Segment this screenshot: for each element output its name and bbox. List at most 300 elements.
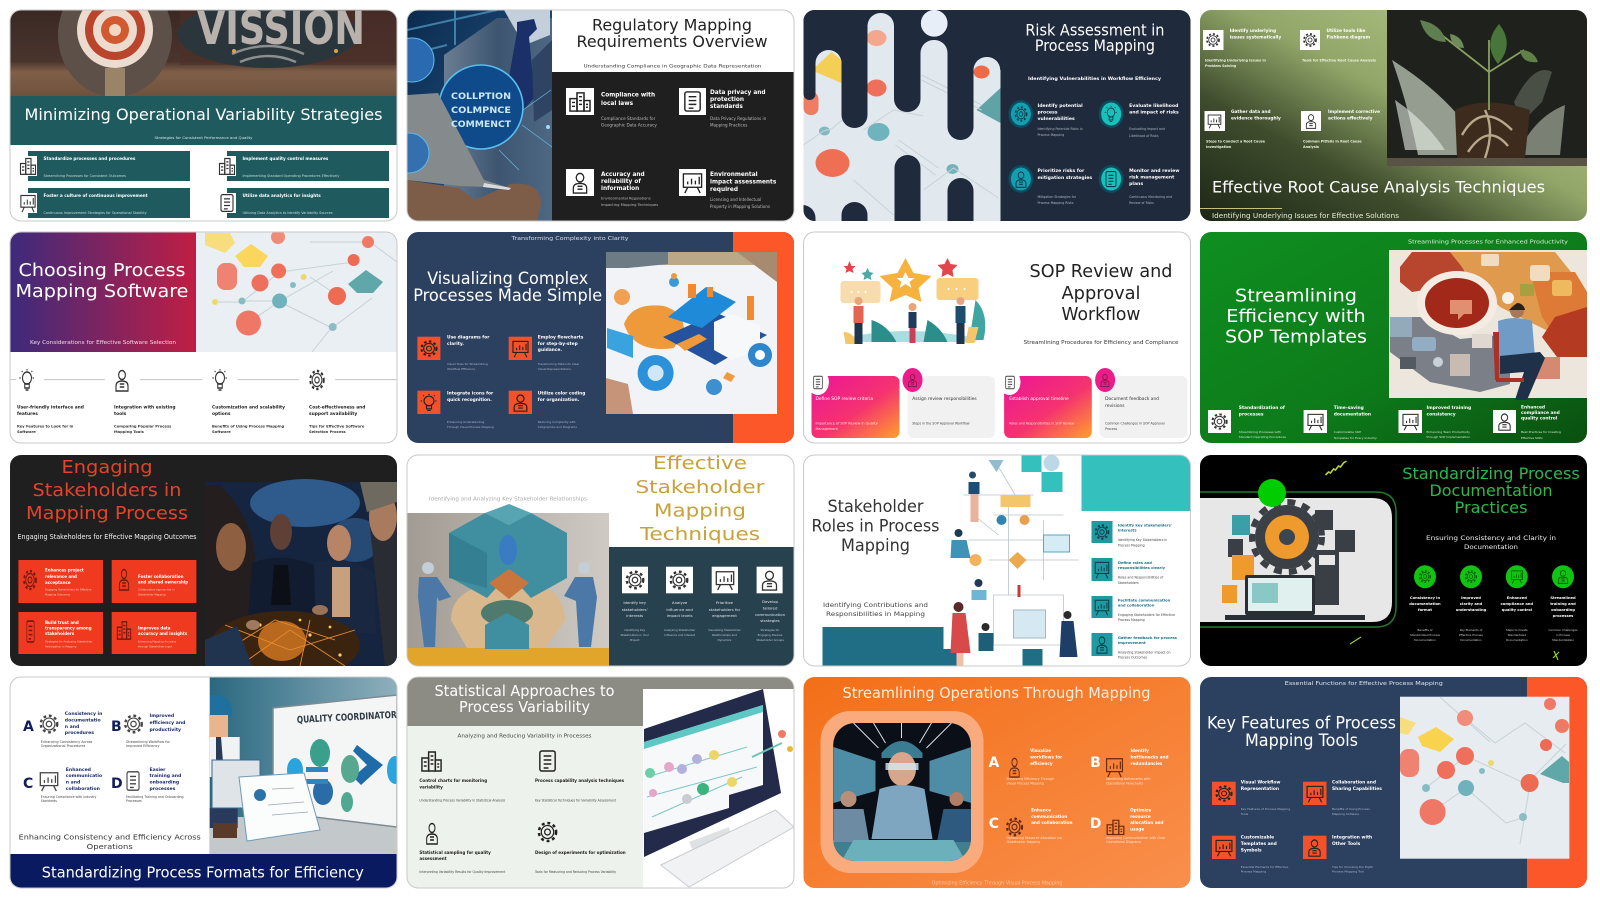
item: cost-effectiveness: Cost-effectiveness and bbox=[309, 404, 365, 410]
item: standardize bbox=[19, 151, 190, 181]
item B: Identifying Bottlenecks with bbox=[1106, 777, 1151, 781]
item: collaboration: Sharing Capabilities bbox=[1332, 786, 1382, 792]
item: compliance: compliance and bbox=[1501, 602, 1533, 606]
panel: statistical approaches bbox=[407, 677, 794, 888]
item: consistency: format bbox=[1418, 608, 1432, 612]
item: accuracy: Accuracy and bbox=[601, 172, 645, 178]
item A: Visualize bbox=[1030, 748, 1051, 753]
item: corrective actions: actions effectively bbox=[1328, 116, 1373, 122]
item A bbox=[988, 748, 1063, 786]
item D: onboarding bbox=[150, 780, 179, 786]
item: trust: Build trust and bbox=[45, 620, 79, 625]
item: customization: options bbox=[212, 411, 231, 417]
card: approval timeline: Establish approval timeline bbox=[1009, 396, 1069, 402]
item: collaboration: and shared ownership bbox=[138, 580, 188, 584]
item: consistency: documentation bbox=[1409, 602, 1441, 606]
item A: procedures bbox=[65, 730, 94, 736]
image: target bulb and vision sign bbox=[10, 10, 396, 96]
item: accuracy: information bbox=[601, 186, 639, 192]
item: diagrams: Workflow Efficiency bbox=[447, 367, 475, 371]
item: gather feedback: Analyzing Stakeholder Impact on bbox=[1118, 650, 1171, 654]
item: accuracy bbox=[566, 169, 658, 207]
item: prioritize stakeholders: engagement bbox=[712, 613, 737, 618]
item: define roles: Define roles and bbox=[1118, 561, 1152, 565]
item: facilitate communication: Process Mapping bbox=[1118, 618, 1145, 622]
item: continuous improvement: Foster a culture of continuous improvement bbox=[44, 193, 148, 198]
item: integration: Mapping Tools bbox=[114, 430, 145, 434]
item: prioritize stakeholders: Prioritize bbox=[716, 600, 734, 605]
item: user-friendly: Key Features to Look for in bbox=[17, 424, 74, 428]
panel: stakeholder roles bbox=[804, 455, 1190, 666]
card: assign responsibilities: Assign review responsibilities bbox=[912, 396, 977, 402]
item: training: training and bbox=[1550, 602, 1576, 606]
item: gather data bbox=[1204, 109, 1281, 149]
item: consistency: Documentation bbox=[1414, 638, 1436, 642]
item: templates: Customizable bbox=[1241, 834, 1274, 840]
item: diagrams: clarity. bbox=[447, 341, 464, 347]
item: compliance: Enhanced bbox=[1521, 404, 1545, 410]
item: templates: Essential Elements for Effective bbox=[1241, 865, 1288, 869]
item: local laws: Compliance Standards for bbox=[601, 116, 656, 121]
subtitle: Key Considerations for Effective Software Selection bbox=[30, 340, 176, 346]
item: define roles: responsibilities clearly bbox=[1118, 566, 1166, 570]
item: integration: tools bbox=[114, 411, 127, 417]
item: local laws: Compliance with bbox=[601, 92, 655, 98]
title: Risk Assessment in bbox=[1025, 20, 1164, 40]
panel: standardizing documentation bbox=[1200, 455, 1587, 666]
panel: minimizing operational variability bbox=[10, 0, 397, 221]
item: collaboration: Collaborative Approaches in bbox=[138, 587, 175, 591]
item: relevance: Enhances project bbox=[45, 568, 84, 572]
item: gather feedback: Gather feedback for process bbox=[1118, 636, 1178, 640]
item: corrective actions bbox=[1301, 109, 1380, 149]
item: training: through SOP Implementation bbox=[1426, 435, 1470, 439]
image: woman and analysts with mapping table bbox=[820, 711, 984, 873]
item: likelihood: Likelihood of Risks bbox=[1129, 134, 1159, 138]
item: communication strategies: communication bbox=[755, 612, 786, 617]
item: integration: Process Mapping Tool bbox=[1332, 870, 1364, 874]
item: monitor bbox=[1099, 165, 1180, 205]
item: relevance: Engaging Stakeholders for Effective bbox=[45, 587, 92, 591]
item: flowcharts: Employ flowcharts bbox=[538, 334, 584, 340]
timeline line bbox=[10, 379, 396, 380]
item: continuous improvement: Continuous Improvement Strategies for Operational Stability bbox=[44, 211, 147, 215]
item: likelihood: Evaluating Impact and bbox=[1129, 127, 1165, 131]
image: quality coordinator with certificates: QUALITY COORDINATOR bbox=[297, 710, 398, 726]
item D: Operational Diagrams bbox=[1106, 840, 1142, 844]
item: integration: Other Tools bbox=[1332, 841, 1361, 847]
image: figures around teal blocks bbox=[407, 504, 609, 666]
item: compliance: Standardized bbox=[1508, 633, 1526, 637]
item: statistical sampling: Statistical sampling for quality bbox=[419, 850, 491, 855]
item: data accuracy bbox=[112, 612, 196, 654]
title bbox=[1030, 262, 1172, 325]
panel: regulatory mapping requirements bbox=[389, 10, 794, 221]
title: Roles in Process bbox=[812, 516, 940, 536]
footer tagline: Optimizing Efficiency Through Visual Process Mapping bbox=[932, 880, 1062, 886]
item: cost-effectiveness: Selection Process bbox=[309, 430, 347, 434]
item: control charts: Control charts for monitoring bbox=[419, 778, 487, 783]
image: gear and laptop on framed panel bbox=[1200, 492, 1396, 627]
title: Efficiency with bbox=[1226, 306, 1366, 327]
item: compliance: Effective SOPs bbox=[1521, 436, 1543, 440]
item C bbox=[989, 808, 1072, 844]
item: identify stakeholders: Process Mapping bbox=[1118, 544, 1145, 548]
title bbox=[434, 682, 614, 716]
item: local laws: Geographic Data Accuracy bbox=[601, 122, 657, 128]
item: facilitate communication bbox=[1092, 596, 1175, 622]
item: user-friendly bbox=[17, 369, 84, 434]
item: capability analysis: Key Statistical Techniques for Variability Assessment bbox=[535, 798, 617, 802]
item C: Enhanced bbox=[66, 767, 91, 773]
item: collaboration: Foster collaboration bbox=[138, 574, 184, 579]
item: identify stakeholders: Identify key bbox=[623, 600, 647, 605]
item: facilitate communication: and collaboration bbox=[1118, 604, 1155, 608]
item: consistency: Benefits of bbox=[1417, 628, 1434, 632]
subtitle bbox=[1426, 535, 1556, 551]
card: define criteria: Define SOP review criteria bbox=[816, 396, 873, 402]
item: data accuracy: Improves data bbox=[138, 626, 171, 630]
item: analyze influence: Analyzing Stakeholder bbox=[664, 628, 696, 632]
item: workflow representation: Representation bbox=[1241, 786, 1279, 792]
item: identify issues: Problem Solving bbox=[1205, 64, 1237, 68]
item D bbox=[1090, 808, 1166, 844]
item: trust: Participation in Mapping bbox=[45, 644, 77, 648]
item: vulnerabilities: Process Mapping bbox=[1038, 133, 1064, 137]
item A: workflows for bbox=[1030, 754, 1063, 760]
item: data privacy: Data Privacy Regulations in bbox=[710, 116, 767, 121]
item: statistical sampling: Interpreting Variability Results for Quality Improvement bbox=[419, 870, 506, 874]
item: prioritize stakeholders: Relationships and bbox=[712, 633, 737, 637]
item: corrective actions: Common Pitfalls in Root Cause bbox=[1303, 140, 1362, 144]
item: communication strategies bbox=[755, 567, 786, 642]
item: facilitate communication: Engaging Stakeholders for Effective bbox=[1118, 613, 1175, 617]
icon: zigzag accent bbox=[1326, 461, 1346, 475]
subtitle: Strategies for Consistent Performance and Quality bbox=[155, 135, 253, 140]
title: Streamlining Operations Through Mapping bbox=[842, 684, 1150, 702]
item: collaboration: Benefits of Using Process bbox=[1332, 807, 1370, 811]
item: trust: Strategies for Analyzing Stakeholder bbox=[45, 639, 93, 643]
title: Engaging bbox=[62, 457, 152, 478]
item: integration: Integration with existing bbox=[114, 404, 176, 410]
item: fishbone: Tools for Effective Root Cause Analysis bbox=[1302, 58, 1376, 62]
title: Regulatory Mapping bbox=[592, 16, 752, 34]
item: standardization: Streamlining Processes with bbox=[1239, 430, 1281, 434]
panel: root cause analysis bbox=[1200, 10, 1587, 221]
item: data analytics bbox=[218, 188, 389, 218]
item: clarity: understanding bbox=[1456, 608, 1487, 612]
image: speech bubble mosaic with seated man bbox=[1389, 250, 1587, 400]
item: diagrams bbox=[417, 334, 490, 371]
title: Mapping Software bbox=[16, 281, 188, 302]
title band bbox=[10, 96, 397, 145]
item: training bbox=[1398, 405, 1471, 439]
item: monitor: Monitor and review bbox=[1129, 168, 1180, 174]
item: flowcharts: Transforming Data into Clear bbox=[537, 362, 580, 366]
item B: B bbox=[1090, 755, 1101, 771]
item B: Operational Flowcharts bbox=[1106, 782, 1143, 786]
item: collaboration: Stakeholder Mapping bbox=[138, 592, 166, 596]
image: business person with compliance hologram: COLLPTION bbox=[451, 92, 511, 102]
item: data privacy: Mapping Practices bbox=[710, 122, 747, 128]
image: target bulb and vision sign: VISSION bbox=[197, 2, 365, 55]
item A: n and bbox=[65, 724, 79, 730]
item: consistency bbox=[1409, 565, 1441, 642]
item: prioritize stakeholders bbox=[708, 567, 742, 642]
item D: processes bbox=[150, 786, 176, 792]
item: environmental: Licensing and Intellectual bbox=[710, 197, 761, 202]
title: Streamlining bbox=[1235, 286, 1357, 306]
title bbox=[1207, 714, 1396, 751]
decorative blocks bbox=[822, 455, 1190, 666]
item: trust: transparency among bbox=[45, 626, 92, 630]
image: team around glowing map bbox=[205, 479, 397, 679]
item: design of experiments bbox=[534, 823, 626, 874]
item: compliance: quality control bbox=[1502, 608, 1532, 612]
item: cost-effectiveness: support availability bbox=[309, 411, 357, 417]
subtitle: Analyzing and Reducing Variability in Processes bbox=[458, 734, 592, 740]
subtitle: Operations bbox=[87, 842, 133, 851]
item: analyze influence: Analyze bbox=[672, 600, 688, 605]
item: corrective actions: Implement corrective bbox=[1328, 109, 1380, 115]
item: icons: Through Visual Process Mapping bbox=[446, 425, 494, 429]
item: collaboration: Mapping Software bbox=[1332, 812, 1359, 816]
item A bbox=[23, 711, 102, 748]
title: Standardizing Process bbox=[1402, 464, 1580, 483]
item: clarity: Key Elements of bbox=[1460, 628, 1483, 632]
item D: Improving Communication with Clear bbox=[1106, 836, 1166, 840]
item: define roles: Roles and Responsibilities of bbox=[1118, 576, 1164, 580]
item: training: Streamlined bbox=[1550, 596, 1576, 600]
item: time-saving: Time-saving bbox=[1334, 405, 1364, 411]
item: relevance: acceptance bbox=[45, 580, 71, 585]
item: compliance: quality control bbox=[1521, 416, 1558, 422]
title bbox=[1402, 464, 1580, 517]
tagline: Essential Functions for Effective Process Mapping bbox=[1285, 681, 1443, 687]
image: process map bbox=[196, 230, 397, 352]
item: prioritize: Mitigation Strategies for bbox=[1038, 195, 1077, 199]
item: accuracy: Environmental Regulations bbox=[601, 196, 651, 200]
item: quality control: Implementing Standard Operating Procedures Effectively bbox=[242, 174, 339, 178]
item: identify stakeholders: Identifying Key Stakeholders in bbox=[1118, 538, 1167, 542]
item: flowcharts bbox=[509, 334, 584, 371]
title: Mapping bbox=[654, 502, 746, 522]
item: templates bbox=[1212, 834, 1288, 874]
subtitle: Identifying Vulnerabilities in Workflow Efficiency bbox=[1028, 76, 1161, 82]
title: Documentation bbox=[1430, 481, 1552, 500]
item: local laws: local laws bbox=[601, 101, 634, 107]
card: approval timeline: Roles and Responsibilities in SOP Review bbox=[1009, 422, 1075, 426]
item: likelihood: and impact of risks bbox=[1129, 110, 1179, 116]
item: time-saving: Customizable SOP bbox=[1334, 430, 1361, 434]
item D: Easier bbox=[150, 767, 166, 773]
item D: usage bbox=[1130, 826, 1144, 832]
title bbox=[1225, 286, 1367, 348]
title: Minimizing Operational Variability Strategies bbox=[24, 105, 382, 124]
item: training: processes bbox=[1553, 614, 1574, 618]
item: vulnerabilities: process bbox=[1038, 110, 1058, 116]
item: communication strategies: Develop bbox=[762, 599, 779, 604]
item: customization: Benefits of Using Process Mapping bbox=[212, 424, 285, 428]
card: define criteria bbox=[807, 369, 900, 438]
item: accuracy: Impacting Mapping Techniques bbox=[601, 203, 658, 207]
item: standardization bbox=[1208, 405, 1286, 439]
item: prioritize stakeholders: Dynamics bbox=[718, 638, 732, 642]
item A: A bbox=[988, 755, 999, 771]
item: environmental bbox=[679, 169, 777, 209]
tagline: Streamlining Processes for Enhanced Productivity bbox=[1408, 240, 1569, 246]
title: Key Features of Process bbox=[1207, 714, 1396, 734]
icon: green circle accent bbox=[1258, 479, 1286, 507]
item A: Enhancing Efficiency Through bbox=[1006, 777, 1054, 781]
item D: D bbox=[111, 776, 123, 792]
panel: visualizing complex processes bbox=[407, 232, 794, 443]
title: Practices bbox=[1454, 498, 1528, 517]
item: consistency: Standardized Process bbox=[1410, 633, 1441, 637]
item: consistency: Consistency in bbox=[1410, 596, 1440, 600]
item: quality control bbox=[218, 151, 389, 181]
title: Choosing Process bbox=[18, 260, 186, 281]
item: standardization: Standardization of bbox=[1239, 405, 1285, 411]
item: color coding: Utilize color coding bbox=[538, 390, 585, 396]
item: prioritize stakeholders: stakeholders for bbox=[709, 607, 741, 612]
item: identify stakeholders bbox=[620, 567, 650, 642]
item: clarity: Documentation bbox=[1460, 638, 1482, 642]
subtitle: Understanding Compliance in Geographic Data Representation bbox=[584, 64, 762, 70]
item: workflow representation: Tools bbox=[1240, 812, 1249, 816]
item: user-friendly: features bbox=[17, 411, 38, 417]
item: compliance: Enhanced bbox=[1507, 596, 1527, 600]
panel: key features of process mapping tools bbox=[1200, 677, 1587, 888]
title: SOP Review and bbox=[1030, 262, 1172, 282]
title: Processes Made Simple bbox=[413, 286, 602, 306]
title: Effective Root Cause Analysis Techniques bbox=[1212, 178, 1545, 196]
item D: Facilitating Training and Onboarding bbox=[126, 795, 184, 799]
item: flowcharts: guidance. bbox=[538, 347, 562, 353]
title bbox=[578, 18, 767, 50]
item: time-saving: documentation bbox=[1334, 412, 1371, 418]
item: design of experiments: Design of experiments for optimization bbox=[535, 850, 626, 855]
item: fishbone: Utilize tools like bbox=[1326, 28, 1366, 34]
image: business person with compliance hologram: COMMENCT bbox=[451, 120, 512, 130]
item D: D bbox=[1090, 816, 1101, 832]
item B bbox=[111, 713, 185, 748]
item: communication strategies: Stakeholder Groups bbox=[756, 638, 784, 642]
item: clarity bbox=[1456, 565, 1487, 642]
item: compliance: Steps to Create bbox=[1506, 628, 1528, 632]
image: quality coordinator with certificates bbox=[210, 677, 403, 854]
item: standardize: Streamlining Processes for Consistent Outcomes bbox=[44, 174, 126, 178]
item: analyze influence: impact levels bbox=[667, 613, 693, 618]
image: plant with splash bbox=[1387, 10, 1587, 166]
item: time-saving: Templates for Every Industry bbox=[1333, 436, 1377, 440]
item: data privacy bbox=[679, 88, 767, 128]
item: fishbone: Fishbone diagram bbox=[1326, 34, 1371, 40]
item: flowcharts: for step-by-step bbox=[538, 341, 578, 347]
item: prioritize: Prioritize risks for bbox=[1038, 168, 1085, 174]
image: isometric process blueprint bbox=[606, 252, 777, 414]
item: user-friendly: Software bbox=[17, 430, 36, 434]
item: capability analysis: Process capability analysis techniques bbox=[535, 778, 625, 783]
item: statistical sampling bbox=[419, 824, 506, 874]
subtitle bbox=[823, 601, 928, 618]
item: analyze influence: influence and bbox=[666, 607, 693, 612]
panel: risk assessment bbox=[804, 10, 1190, 221]
item: workflow representation bbox=[1212, 780, 1290, 816]
subtitle: Identifying Contributions and bbox=[823, 601, 928, 609]
item: workflow representation: Key Features of Process Mapping bbox=[1241, 807, 1290, 811]
item: corrective actions: Analysis bbox=[1303, 145, 1319, 149]
title: Process Variability bbox=[459, 698, 590, 716]
image: business person with compliance hologram bbox=[408, 10, 552, 220]
item B: redundancies bbox=[1130, 761, 1163, 766]
title: Effective bbox=[653, 454, 747, 474]
item: communication strategies: strategies bbox=[760, 618, 780, 623]
item C: C bbox=[23, 776, 33, 792]
title: Stakeholder bbox=[636, 478, 765, 498]
item B: B bbox=[111, 719, 122, 735]
item: icons bbox=[417, 390, 494, 429]
title: Mapping Tools bbox=[1245, 731, 1358, 751]
item: time-saving bbox=[1304, 405, 1377, 440]
item: define roles bbox=[1092, 558, 1166, 585]
image: process map bbox=[1400, 697, 1569, 859]
item: prioritize stakeholders: Visualizing Stakeholder bbox=[708, 628, 742, 632]
item: data accuracy: accuracy and insights bbox=[138, 631, 188, 636]
item: vulnerabilities: vulnerabilities bbox=[1038, 116, 1075, 122]
item: diagrams: Use diagrams for bbox=[447, 334, 490, 340]
item: training: consistency bbox=[1426, 412, 1456, 418]
item: control charts: Understanding Process Variability in Statistical Analysis bbox=[419, 798, 505, 802]
item: prioritize: mitigation strategies bbox=[1038, 175, 1092, 181]
item: templates: Process Mapping bbox=[1241, 870, 1266, 874]
card: assign responsibilities: Steps in the SOP Approval Workflow bbox=[912, 422, 970, 426]
item A: A bbox=[23, 719, 34, 735]
image: pill-cropped process map bbox=[804, 10, 1000, 221]
item: cost-effectiveness: Tips for Effective Software bbox=[309, 424, 365, 428]
item: standardization: processes bbox=[1239, 412, 1264, 418]
item: identify issues: Identify underlying bbox=[1230, 28, 1276, 34]
item: integration: Tips for Choosing the Right bbox=[1331, 865, 1373, 869]
title: Mapping Process bbox=[26, 503, 188, 524]
item: training: Common Challenges bbox=[1549, 628, 1578, 632]
item: trust bbox=[18, 612, 103, 654]
item: icons: quick recognition. bbox=[447, 397, 492, 403]
title: Process Mapping bbox=[1035, 36, 1155, 55]
item: data accuracy: through Stakeholder Input bbox=[138, 644, 172, 648]
item: statistical sampling: assessment bbox=[419, 856, 447, 861]
item: workflow representation: Visual Workflow bbox=[1241, 780, 1280, 786]
item: environmental: Environmental bbox=[710, 172, 758, 178]
item A: Enhancing Consistency Across bbox=[41, 740, 93, 744]
item: define roles: Stakeholders bbox=[1118, 581, 1139, 585]
item: identify stakeholders: Identifying Key bbox=[624, 628, 645, 632]
item B: efficiency and bbox=[150, 720, 185, 726]
title bbox=[17, 262, 188, 300]
illustration: team with star reviews bbox=[840, 258, 985, 344]
card: document feedback: Common Challenges in SOP Approval bbox=[1105, 422, 1165, 426]
item: user-friendly: User-friendly interface and bbox=[17, 404, 84, 410]
item A: Visual Process Mapping bbox=[1006, 782, 1044, 786]
item D: training and bbox=[150, 773, 181, 779]
image: business person with compliance hologram: COLMPNCE bbox=[451, 106, 511, 116]
item A: Consistency in bbox=[65, 711, 102, 717]
item: control charts: variability bbox=[419, 784, 443, 790]
item: icons: Integrate icons for bbox=[447, 390, 494, 396]
item: continuous improvement bbox=[19, 188, 190, 218]
item B: Identify bbox=[1130, 748, 1149, 753]
item: trust: stakeholders bbox=[45, 631, 75, 636]
